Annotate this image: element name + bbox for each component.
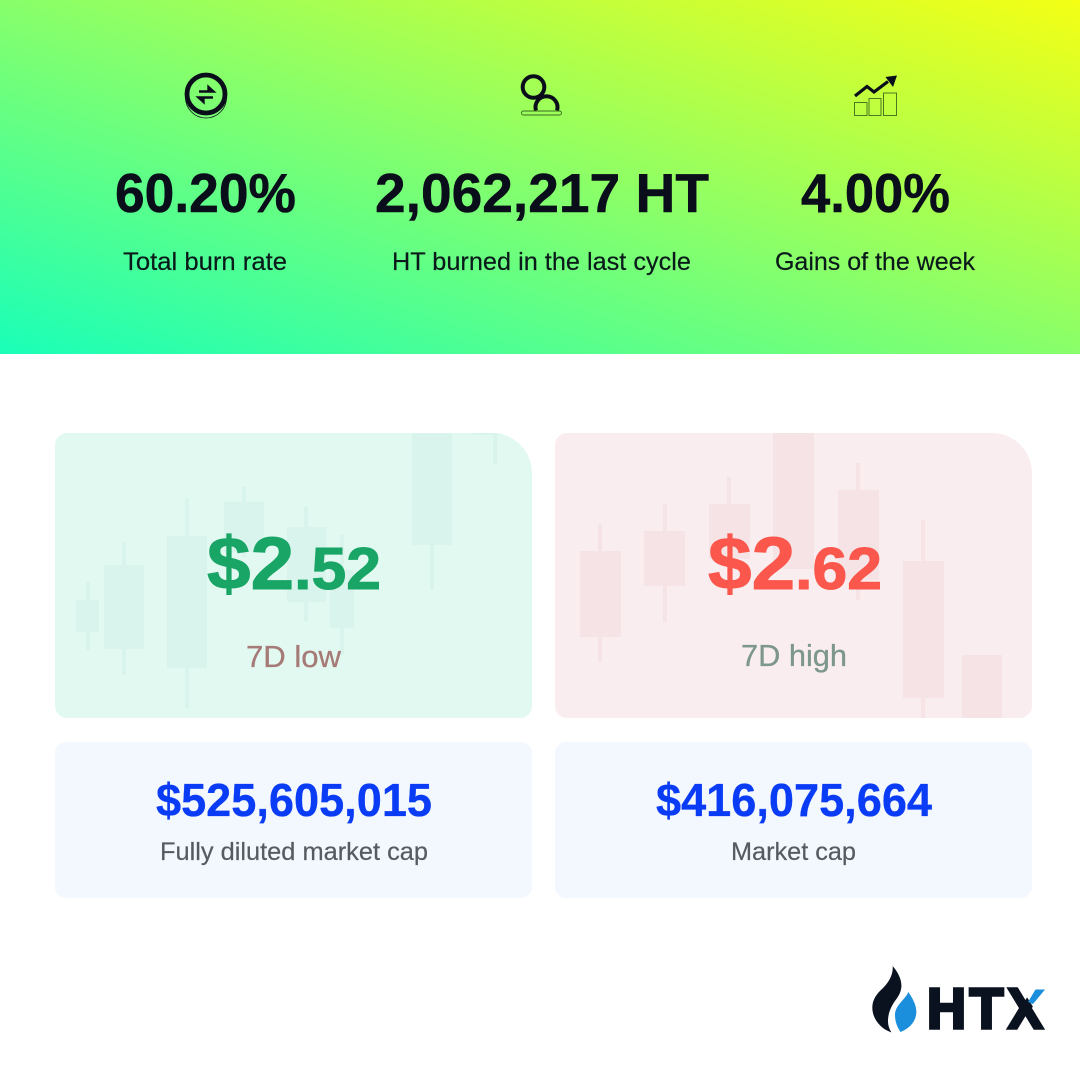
- price: 2.62: $2.62: [708, 522, 882, 605]
- panel: market cap: [555, 742, 1032, 898]
- stat: total burn rate: Total burn rate: [123, 248, 287, 276]
- gradient header band: [0, 0, 1080, 354]
- panel: market cap: $416,075,664: [656, 774, 932, 826]
- label: 7D high: 7D high: [741, 638, 847, 673]
- label: 7D low: 7D low: [246, 639, 342, 674]
- price: 2.52: $2.52: [207, 522, 381, 605]
- icon: blue X accent: [1020, 986, 1050, 1034]
- stat: HT burned in the last cycle: [375, 162, 709, 276]
- panel: fully diluted market cap: $525,605,015: [156, 774, 432, 826]
- stat: gains of the week: Gains of the week: [775, 248, 975, 276]
- panel: fully diluted market cap: [55, 742, 532, 898]
- logo: HTX: X: [1006, 978, 1045, 1043]
- panel: market cap: Market cap: [731, 838, 856, 866]
- stat: total burn rate: 60.20%: [115, 162, 296, 224]
- panel: 7D high: [555, 433, 1032, 718]
- icon: coins on a base: [522, 76, 562, 115]
- icon: flame: [872, 966, 916, 1032]
- icon: rising bar chart with arrow: [854, 76, 897, 116]
- icon: swap coin: [186, 75, 226, 118]
- stat: gains of the week: [775, 162, 975, 276]
- stat: gains of the week: 4.00%: [801, 162, 950, 224]
- stat: total burn rate: [115, 162, 296, 276]
- candlestick chart background red: [580, 433, 1002, 718]
- stat: HT burned in the last cycle: HT burned in the last cycle: [392, 248, 691, 276]
- candlestick chart background green: [76, 433, 515, 708]
- panel: 7D low: [55, 433, 532, 718]
- logo: HTX: [872, 966, 1050, 1043]
- logo: HTX: T: [969, 978, 1004, 1043]
- stat: HT burned in the last cycle: 2,062,217 HT: [375, 162, 709, 224]
- panel: fully diluted market cap: Fully diluted market cap: [160, 838, 428, 866]
- logo: HTX: H: [925, 978, 968, 1043]
